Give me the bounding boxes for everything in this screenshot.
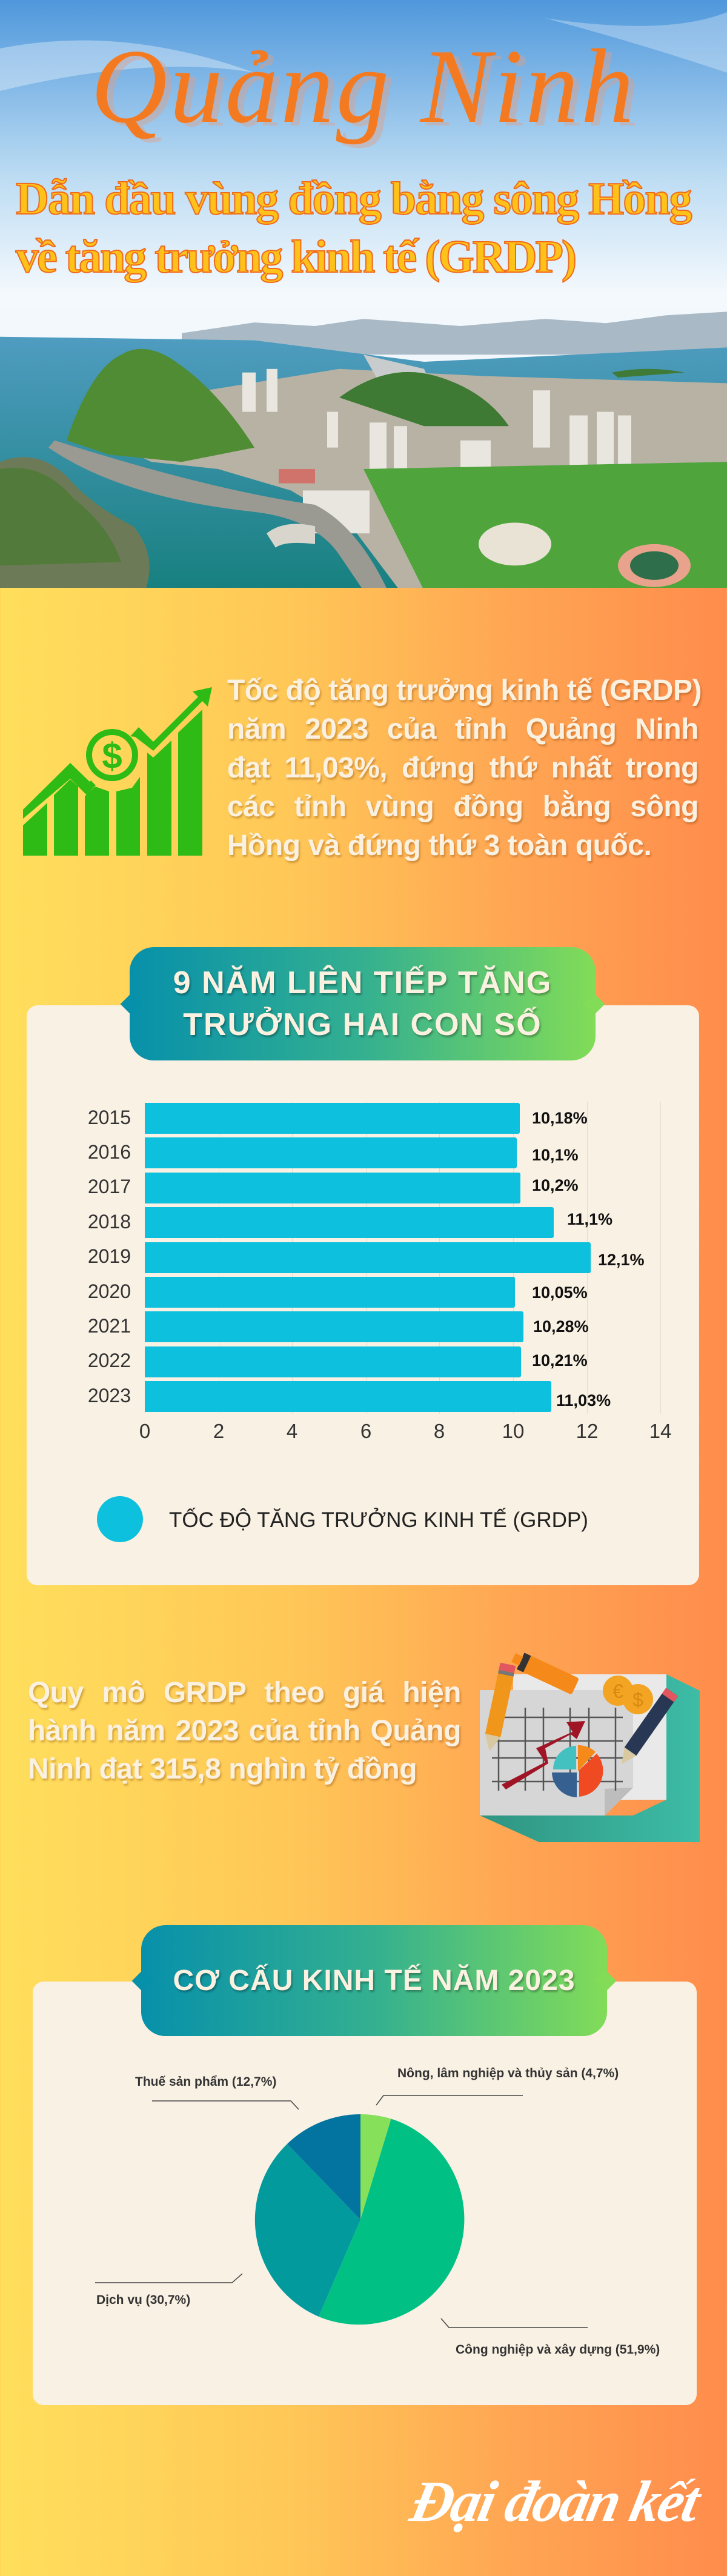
icon: chart paper with pencils and coins: € — [612, 1680, 623, 1702]
bar chart: 10,28% — [533, 1317, 589, 1336]
title: Quảng Ninh: Quảng Ninh — [91, 27, 636, 145]
text block: GRDP scale: Ninh đạt 315,8 nghìn tỷ đồng — [28, 1753, 417, 1785]
bar chart: 11,1% — [567, 1210, 612, 1228]
subtitle — [15, 173, 692, 283]
bar chart: 10 — [502, 1420, 524, 1442]
text block: GRDP scale: Quy mô GRDP theo giá hiện — [28, 1677, 461, 1709]
bar chart: 2023 — [88, 1385, 131, 1406]
text block: GRDP growth 2023: Hồng và đứng thứ 3 toàn quốc. — [227, 830, 651, 862]
panel: pie chart — [33, 1982, 697, 2405]
label: thuế sản phẩm: Thuế sản phẩm (12,7%) — [135, 2075, 276, 2089]
subtitle: Dẫn đầu vùng đồng bằng sông Hồng — [16, 173, 691, 224]
bar chart: 14 — [649, 1420, 671, 1442]
panel: bar chart — [27, 1005, 699, 1585]
text block: GRDP growth 2023: năm 2023 của tỉnh Quảng Ninh — [227, 713, 699, 745]
icon: chart paper with pencils and coins — [480, 1652, 700, 1842]
bar chart: 2015 — [88, 1107, 131, 1128]
logo: Đại đoàn kết: Đại đoàn kết — [405, 2469, 704, 2534]
icon: growth chart with dollar: $ — [102, 736, 122, 776]
heading: 9 năm liên tiếp: 9 NĂM LIÊN TIẾP TĂNG — [173, 965, 552, 1000]
bar chart: 2018 — [88, 1211, 131, 1233]
icon: chart paper with pencils and coins: $ — [632, 1689, 643, 1711]
heading: cơ cấu kinh tế: CƠ CẤU KINH TẾ NĂM 2023 — [173, 1965, 576, 1997]
heading: cơ cấu kinh tế — [141, 1925, 607, 2036]
bar chart: 2019 — [88, 1245, 131, 1267]
bar chart: 0 — [139, 1420, 150, 1442]
bar chart: 6 — [360, 1420, 371, 1442]
text block: GRDP scale: hành năm 2023 của tỉnh Quảng — [28, 1715, 461, 1747]
icon: growth chart with dollar — [23, 687, 212, 856]
bar chart: 10,2% — [532, 1176, 579, 1194]
bar chart: 10,1% — [532, 1146, 579, 1164]
bar chart — [88, 1102, 671, 1442]
label: công nghiệp: Công nghiệp và xây dựng (51,9%) — [456, 2343, 660, 2357]
text block: GRDP growth 2023: đạt 11,03%, đứng thứ nhất trong — [227, 752, 699, 784]
bar chart: 2022 — [88, 1350, 131, 1371]
text block: GRDP scale — [28, 1677, 462, 1788]
label: dịch vụ: Dịch vụ (30,7%) — [96, 2293, 190, 2307]
bar chart: 11,03% — [556, 1391, 611, 1409]
label: nông lâm nghiệp: Nông, lâm nghiệp và thủy sản (4,7%) — [397, 2066, 619, 2080]
text block: GRDP growth 2023 — [227, 674, 703, 864]
legend — [97, 1496, 588, 1542]
heading: 9 năm liên tiếp — [130, 947, 596, 1060]
bar chart: 4 — [287, 1420, 297, 1442]
bar chart: 2016 — [88, 1141, 131, 1163]
bar chart: 2017 — [88, 1176, 131, 1197]
bar chart: 8 — [434, 1420, 445, 1442]
subtitle: về tăng trưởng kinh tế (GRDP) — [16, 231, 575, 282]
bar chart: 10,05% — [532, 1283, 588, 1302]
header photo — [0, 0, 727, 588]
bar chart: 12,1% — [598, 1251, 645, 1269]
bar chart: 2020 — [88, 1280, 131, 1302]
bar chart: 2021 — [88, 1315, 131, 1337]
pie chart — [95, 2095, 588, 2328]
text block: GRDP growth 2023: các tỉnh vùng đồng bằng sông — [227, 791, 699, 823]
bar chart: 12 — [576, 1420, 598, 1442]
bar chart: 10,18% — [532, 1109, 588, 1127]
bar chart: 10,21% — [532, 1351, 588, 1370]
heading: 9 năm liên tiếp: TRƯỞNG HAI CON SỐ — [183, 1007, 542, 1042]
legend: TỐC ĐỘ TĂNG TRƯỞNG KINH TẾ (GRDP) — [169, 1508, 588, 1532]
text block: GRDP growth 2023: Tốc độ tăng trưởng kinh tế (GRDP) — [227, 674, 702, 707]
bar chart: 2 — [213, 1420, 224, 1442]
